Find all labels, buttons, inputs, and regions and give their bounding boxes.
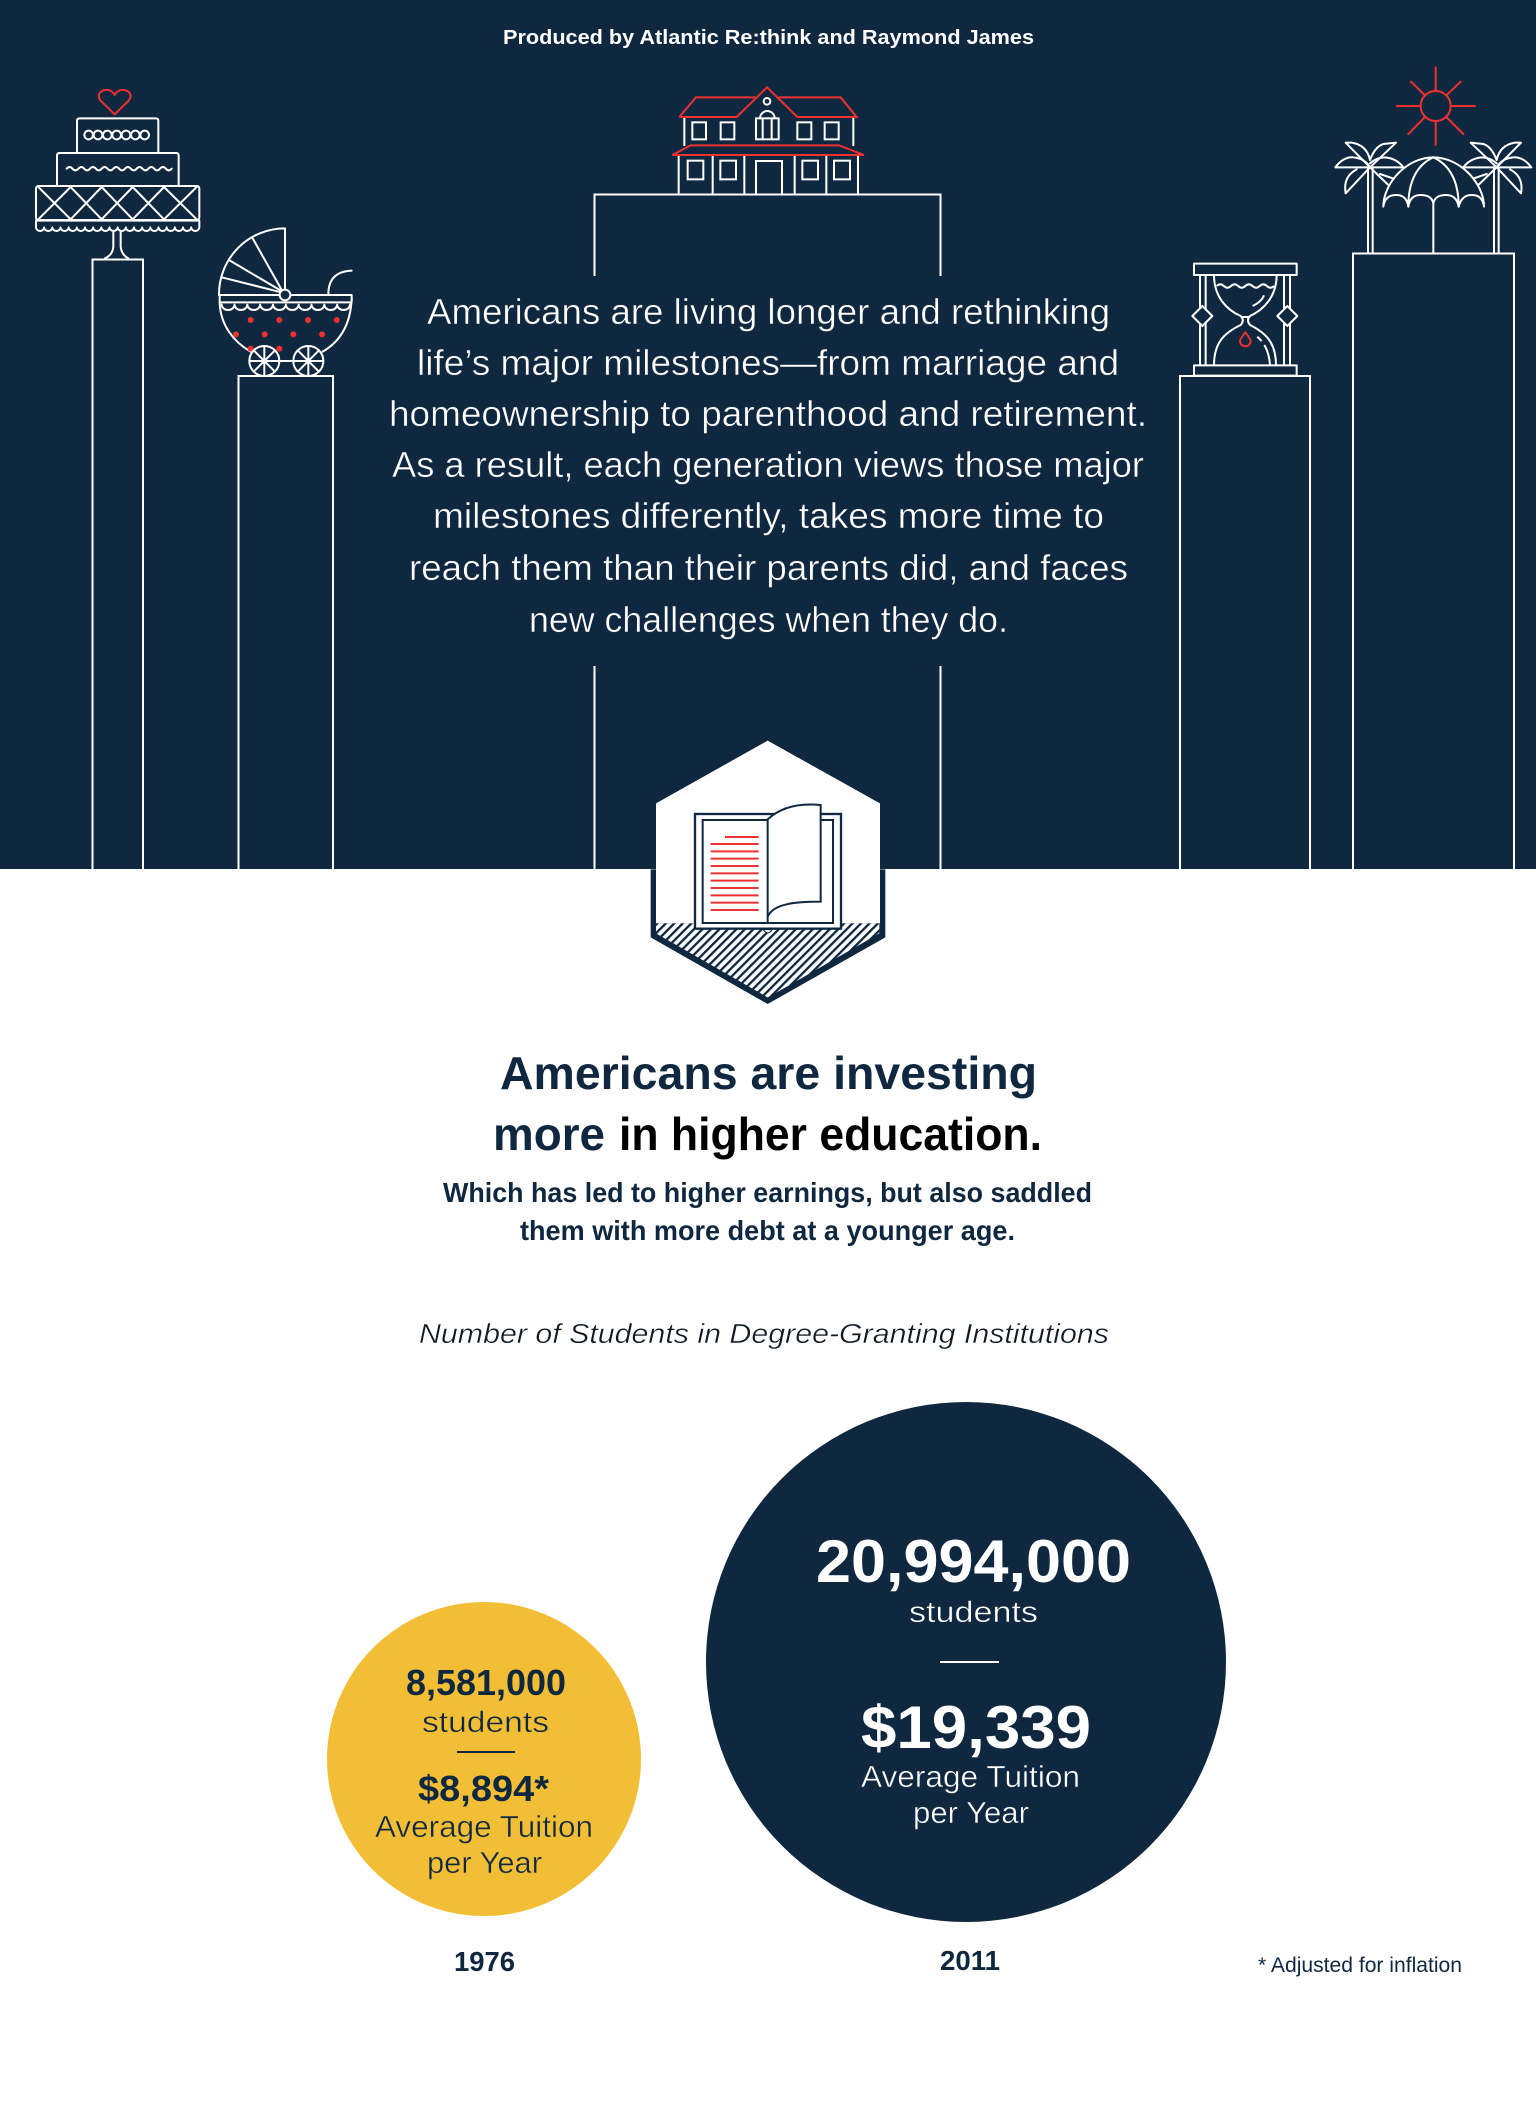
footnote: * Adjusted for inflation (1258, 1954, 1462, 1977)
intro paragraph (389, 291, 1147, 640)
bubble: 2011: students (909, 1596, 1038, 1629)
pillar: wedding cake (92, 260, 143, 869)
pram wheels (249, 346, 323, 376)
central pillar lower sides (594, 666, 940, 869)
icon: beach with palms, umbrella and sun (1335, 67, 1531, 253)
intro paragraph: new challenges when they do. (529, 599, 1008, 640)
section heading: Americans are investing (500, 1047, 1037, 1099)
panel: navy header band (0, 0, 1536, 869)
bubble: 1976: Average Tuition (375, 1809, 593, 1844)
section subheading: them with more debt at a younger age. (520, 1215, 1015, 1246)
hatched base of badge (656, 923, 879, 997)
section heading: more (493, 1108, 605, 1160)
year label: 1976: 1976 (454, 1946, 515, 1977)
credit line: Produced by Atlantic Re:think and Raymond James (503, 26, 1034, 49)
intro paragraph: Americans are living longer and rethinking (427, 291, 1110, 332)
chart title: Number of Students in Degree-Granting Institutions (419, 1318, 1109, 1349)
red sun (1397, 67, 1475, 145)
intro paragraph: reach them than their parents did, and faces (409, 547, 1128, 588)
section heading: in higher education. (619, 1108, 1042, 1160)
icon: baby pram (219, 228, 352, 376)
pillars (92, 194, 1514, 869)
red sand drop (1240, 332, 1251, 346)
right palm (1463, 143, 1531, 253)
open book (695, 804, 841, 933)
bubble: 2011: 20,994,000 (816, 1528, 1131, 1595)
icon: house (672, 87, 864, 194)
bubble: 2011: Average Tuition (861, 1759, 1080, 1794)
icon: red heart (99, 90, 131, 114)
intro paragraph: milestones differently, takes more time to (433, 495, 1104, 536)
bubble: 1976: $8,894* (418, 1768, 549, 1809)
central pillar top bracket (594, 194, 940, 276)
icon: wedding cake (36, 90, 199, 258)
red text lines (711, 837, 759, 910)
beach umbrella (1383, 157, 1484, 253)
bubble: 1976: 8,581,000 (406, 1662, 566, 1703)
pram red dots (233, 317, 340, 352)
pillar: pram (238, 376, 333, 869)
bubble: 2011: per Year (913, 1795, 1029, 1830)
year label: 2011: 2011 (940, 1945, 1000, 1976)
section subheading: Which has led to higher earnings, but also saddled (443, 1177, 1092, 1208)
bubble: 2011 (706, 1402, 1226, 1922)
section heading (493, 1047, 1042, 1160)
intro paragraph: life’s major milestones—from marriage and (417, 342, 1119, 383)
intro paragraph: homeownership to parenthood and retirement. (389, 393, 1147, 434)
pillar: hourglass (1180, 376, 1310, 869)
bubble: 1976: per Year (427, 1845, 542, 1880)
bubble: 2011: $19,339 (861, 1694, 1091, 1761)
pillar: beach (1353, 254, 1514, 869)
icon: open book hexagon badge (651, 741, 885, 1004)
left palm (1335, 143, 1403, 253)
icon: hourglass (1192, 264, 1297, 376)
house red roof (672, 87, 864, 155)
section subheading (443, 1177, 1092, 1246)
bubble: 1976: students (422, 1706, 549, 1739)
intro paragraph: As a result, each generation views those major (392, 444, 1144, 485)
bubble: 1976 (327, 1602, 641, 1916)
